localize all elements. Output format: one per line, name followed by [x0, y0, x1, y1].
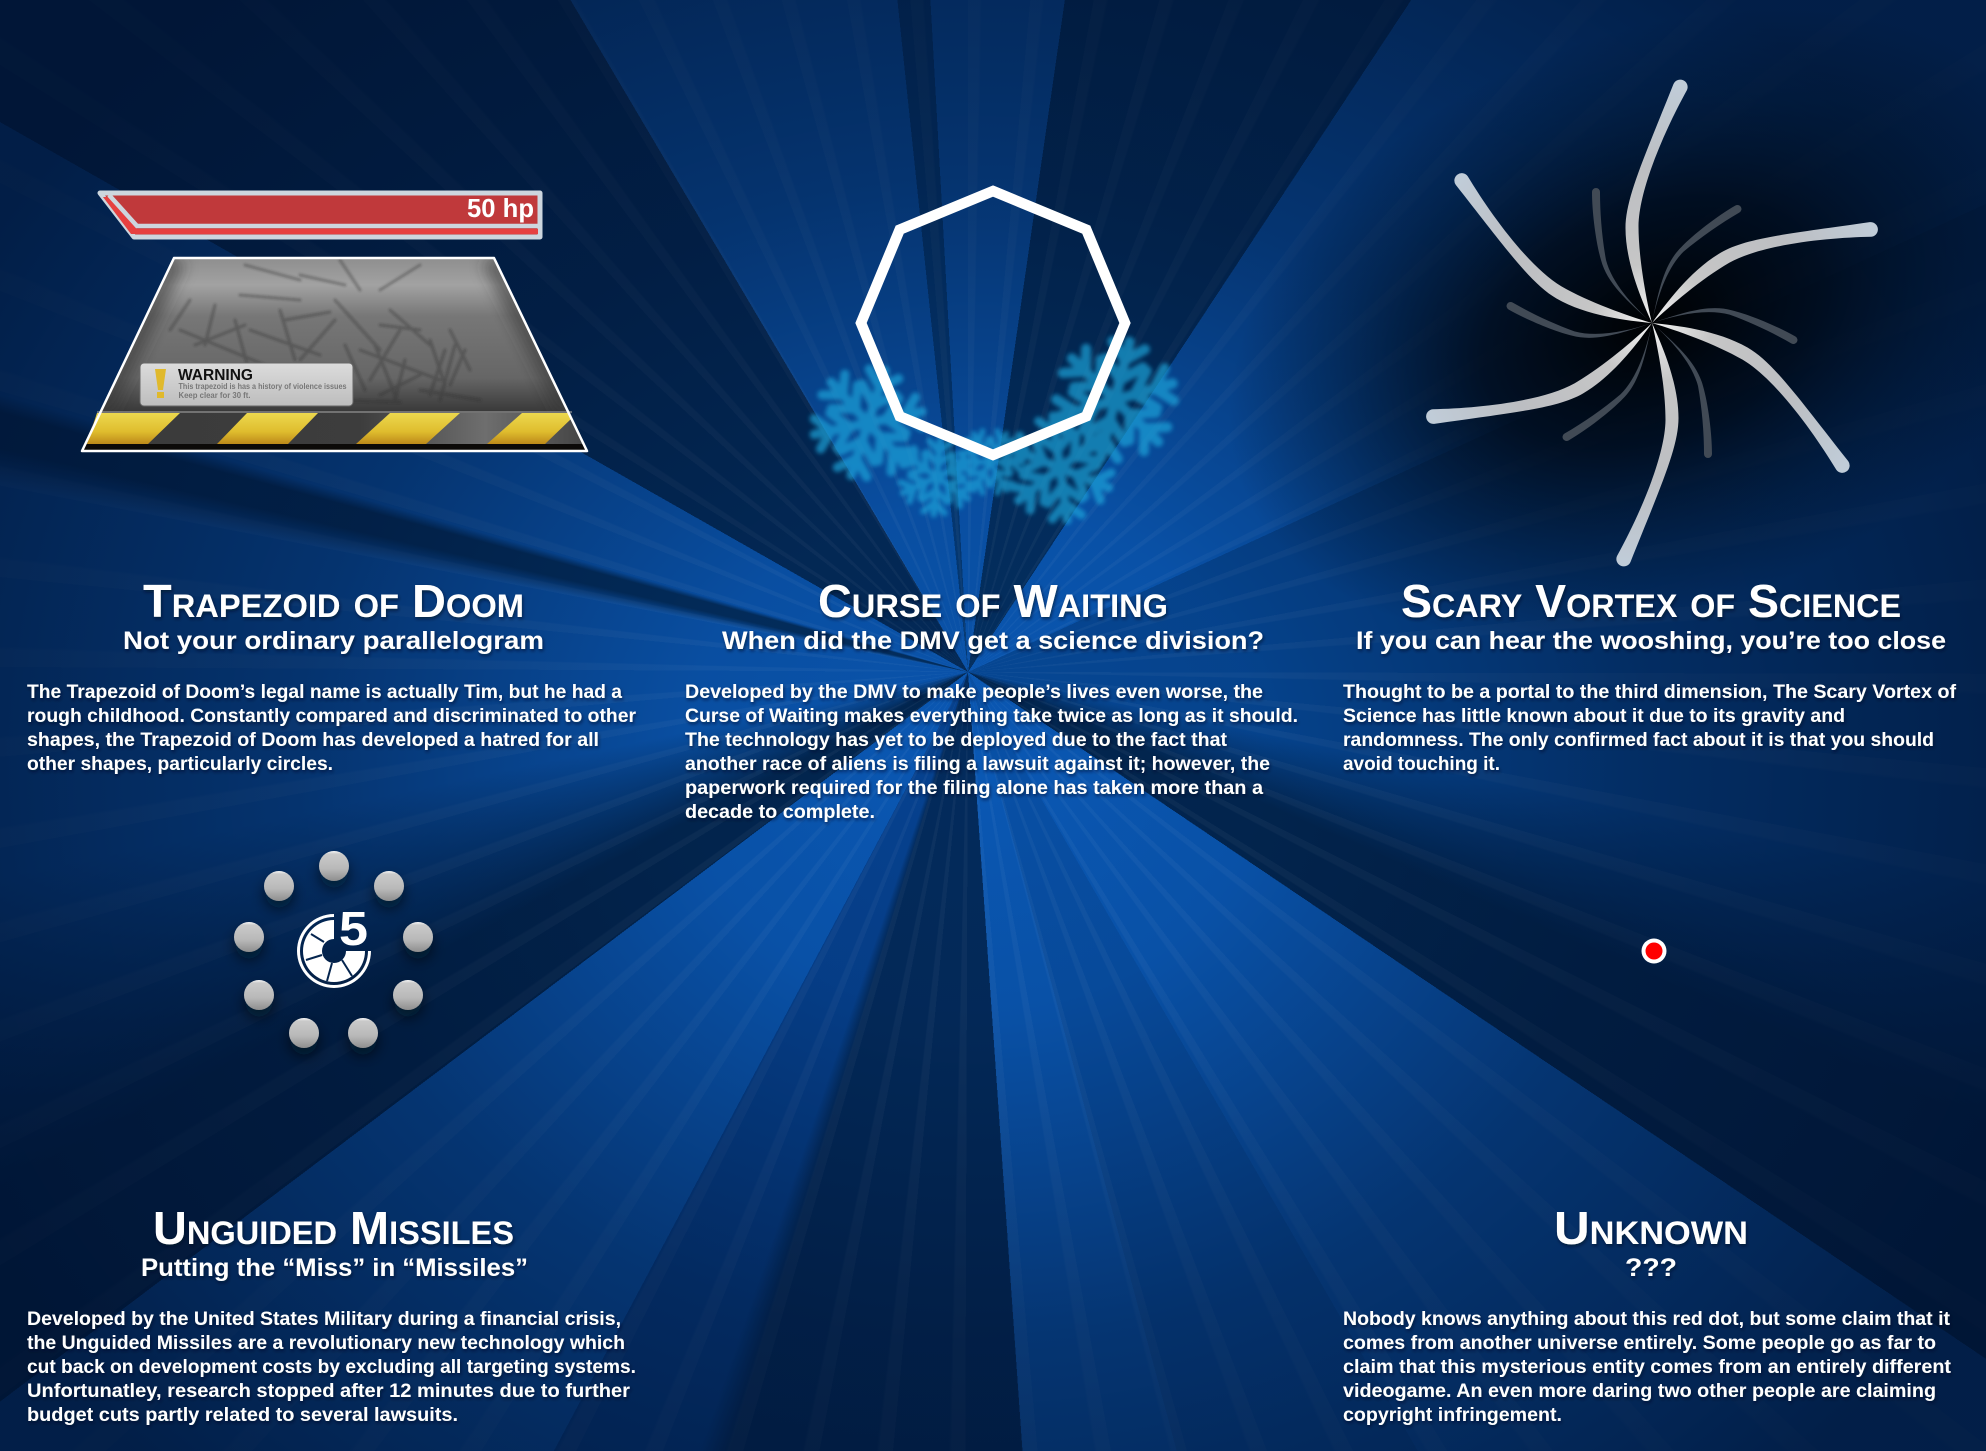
- panel: unguided missiles text: [27, 1202, 636, 1426]
- missiles: [234, 851, 433, 1048]
- icon: red dot: [1642, 938, 1666, 964]
- icon: reload wheel: 5: [339, 903, 368, 956]
- body text: shapes, the Trapezoid of Doom has developed a hatred for all: [27, 730, 599, 751]
- subheading: If you can hear the wooshing, you’re too close: [1356, 627, 1946, 655]
- body text: [1343, 1309, 1952, 1426]
- subheading: Not your ordinary parallelogram: [123, 627, 544, 655]
- body text: the Unguided Missiles are a revolutionary new technology which: [27, 1333, 625, 1354]
- warning label: [140, 363, 353, 406]
- body text: Thought to be a portal to the third dimension, The Scary Vortex of: [1343, 682, 1957, 703]
- heading: Trapezoid of Doom: [143, 575, 524, 627]
- heading: Unknown: [1554, 1202, 1748, 1254]
- body text: Developed by the United States Military during a financial crisis,: [27, 1309, 621, 1330]
- scratches on trapezoid: [170, 260, 480, 402]
- body text: Unfortunatley, research stopped after 12 minutes due to further: [27, 1381, 631, 1402]
- body text: cut back on development costs by excluding all targeting systems.: [27, 1357, 636, 1378]
- body text: [685, 682, 1298, 823]
- body text: claim that this mysterious entity comes from an entirely different: [1343, 1357, 1952, 1378]
- body text: randomness. The only confirmed fact about it is that you should: [1343, 730, 1934, 751]
- warning label: WARNING: [178, 367, 253, 384]
- warning label: This trapezoid is has a history of violence issues: [178, 382, 347, 391]
- body text: decade to complete.: [685, 802, 875, 823]
- body text: other shapes, particularly circles.: [27, 754, 333, 775]
- vortex shadow: [1100, 0, 1986, 760]
- hazard stripe band: [82, 411, 587, 451]
- body text: [27, 682, 637, 775]
- subheading: ???: [1625, 1254, 1677, 1282]
- body text: rough childhood. Constantly compared and discriminated to other: [27, 706, 637, 727]
- heading: Unguided Missiles: [153, 1202, 514, 1254]
- hp value: 50 hp: [467, 193, 534, 223]
- body text: Developed by the DMV to make people’s lives even worse, the: [685, 682, 1263, 703]
- panel: unknown text: [1343, 1202, 1952, 1426]
- panel: scary vortex text: [1343, 575, 1957, 775]
- warning label: Keep clear for 30 ft.: [178, 391, 250, 400]
- subheading: When did the DMV get a science division?: [722, 627, 1264, 655]
- body text: videogame. An even more daring two other people are claiming: [1343, 1381, 1936, 1402]
- body text: Nobody knows anything about this red dot, but some claim that it: [1343, 1309, 1951, 1330]
- panel: trapezoid of doom text: [27, 575, 637, 775]
- icon: missile ring: [234, 851, 433, 1048]
- body text: another race of aliens is filing a lawsuit against it; however, the: [685, 754, 1270, 775]
- icon: octagon: [861, 191, 1125, 455]
- subheading: Putting the “Miss” in “Missiles”: [141, 1254, 528, 1282]
- body text: avoid touching it.: [1343, 754, 1500, 775]
- icon: snowflakes: [797, 327, 1189, 527]
- soft rim glow and dark sides: [100, 258, 570, 410]
- icon: health bar 50 hp: [100, 193, 540, 237]
- body text: Science has little known about it due to its gravity and: [1343, 706, 1845, 727]
- body text: paperwork required for the filing alone has taken more than a: [685, 778, 1263, 799]
- body text: The technology has yet to be deployed due to the fact that: [685, 730, 1228, 751]
- body text: [1343, 682, 1957, 775]
- icon: reload wheel: [297, 903, 371, 988]
- body text: copyright infringement.: [1343, 1405, 1562, 1426]
- body text: Curse of Waiting makes everything take twice as long as it should.: [685, 706, 1298, 727]
- body text: comes from another universe entirely. Some people go as far to: [1343, 1333, 1936, 1354]
- trapezoid outline: [82, 258, 587, 451]
- icon: vortex: [1423, 80, 1881, 566]
- panel: curse of waiting text: [685, 575, 1298, 823]
- icon: exclamation mark: [155, 369, 166, 398]
- icon: trapezoid of doom: [82, 258, 587, 451]
- body text: [27, 1309, 636, 1426]
- heading: Curse of Waiting: [818, 575, 1168, 627]
- heading: Scary Vortex of Science: [1401, 575, 1901, 627]
- body text: budget cuts partly related to several lawsuits.: [27, 1405, 458, 1426]
- body text: The Trapezoid of Doom’s legal name is actually Tim, but he had a: [27, 682, 622, 703]
